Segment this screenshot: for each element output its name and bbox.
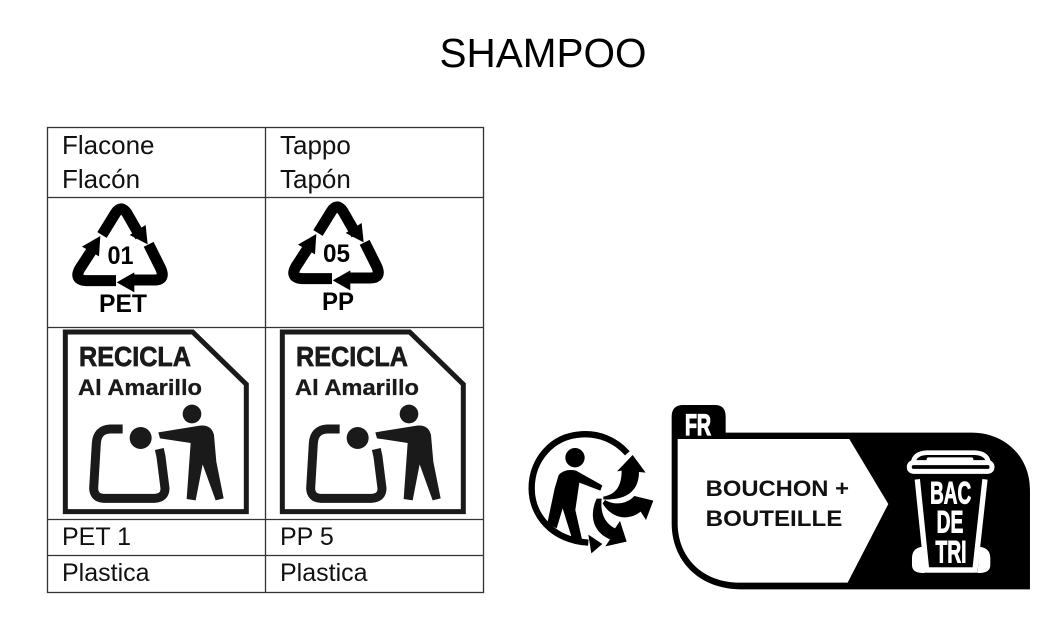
table header text: Tappo: Tappo — [280, 130, 351, 160]
label text: bouchon + bouteille: BOUCHON + — [706, 476, 849, 501]
table header text: Flacone: Flacón — [62, 164, 140, 194]
icon: PET 01 recycling triangle — [78, 209, 162, 318]
material code: PP 5: PP 5 — [280, 523, 334, 551]
table header text: Flacone: Flacone — [62, 130, 154, 160]
icon: Recicla al amarillo, PET column — [65, 332, 246, 512]
icon: Triman recycling symbol — [532, 434, 653, 553]
label white panel — [678, 439, 888, 583]
material code: PET 1: PET 1 — [62, 523, 131, 551]
material name: Plastica, PP column: Plastica — [280, 559, 368, 587]
icon: Recicla al amarillo, PP column — [282, 332, 463, 512]
table header text: Tappo: Tapón — [280, 164, 351, 194]
icon: PET 01 recycling triangle: PET — [99, 290, 147, 318]
table — [48, 128, 484, 592]
icon: sorting bin: BAC — [930, 474, 971, 510]
label black background — [672, 405, 1030, 589]
icon: sorting bin: TRI — [935, 533, 966, 569]
title: SHAMPOO — [440, 30, 646, 76]
icon: Recicla al amarillo, PET column: Al Amarillo — [78, 375, 202, 400]
icon: PET 01 recycling triangle: 01 — [108, 242, 134, 270]
icon: PP 05 recycling triangle: 05 — [323, 240, 350, 268]
icon: Recicla al amarillo, PP column: Al Amarillo — [295, 375, 419, 400]
icon: Recicla al amarillo, PP column: RECICLA — [296, 341, 408, 372]
FR tag: FR — [685, 409, 711, 442]
label text: bouchon + bouteille — [706, 476, 849, 531]
table header text: Flacone — [62, 130, 154, 194]
icon: PP 05 recycling triangle — [294, 207, 378, 316]
icon: Recicla al amarillo, PET column: RECICLA — [79, 341, 191, 372]
sorting label: FR Bac de tri — [672, 405, 1030, 589]
icon: sorting bin: DE — [937, 504, 963, 540]
material name: Plastica, PET column: Plastica — [62, 559, 150, 587]
table header text: Tappo — [280, 130, 351, 194]
icon: sorting bin — [909, 453, 992, 572]
label text: bouchon + bouteille: BOUTEILLE — [706, 506, 842, 531]
icon: PP 05 recycling triangle: PP — [322, 288, 354, 316]
